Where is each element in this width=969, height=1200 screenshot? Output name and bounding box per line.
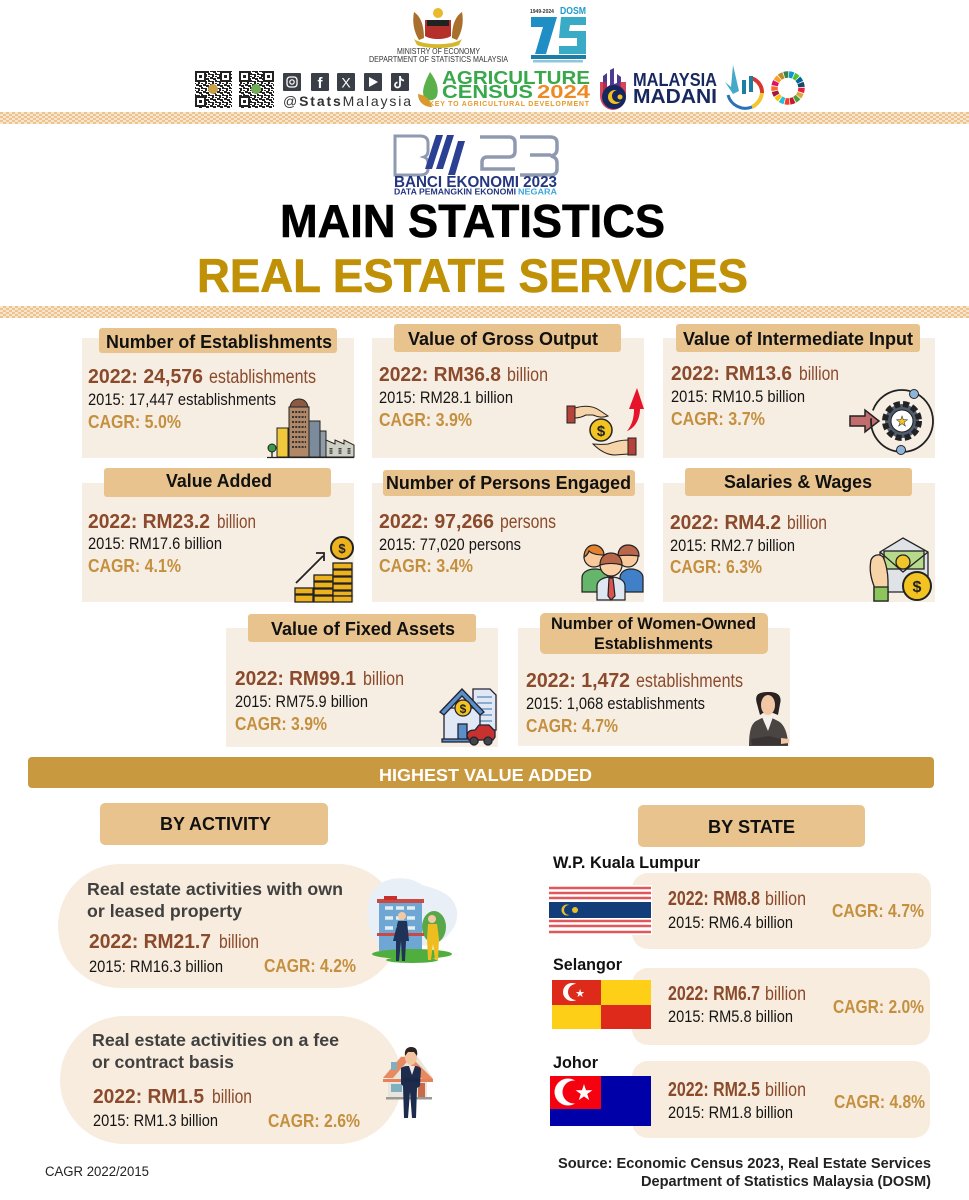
panel: number of establishments [82, 328, 354, 458]
heading: by activity: BY ACTIVITY [160, 813, 272, 834]
panel: Selangor [552, 968, 930, 1045]
panel: value added: 2015: RM17.6 billion [88, 534, 222, 553]
title: MAIN STATISTICS [280, 195, 665, 247]
logo: Banci Ekonomi 2023: NEGARA [518, 188, 557, 196]
heading: Salaries & Wages [724, 471, 872, 492]
source [558, 1156, 931, 1190]
flag: Selangor: ★ [575, 988, 585, 1000]
panel: number of persons engaged: 2015: 77,020 persons [379, 535, 521, 554]
panel: value of fixed assets: 2015: RM75.9 billion [235, 692, 368, 711]
logo: Agriculture Census 2024: KEY TO AGRICULTURAL DEVELOPMENT [429, 101, 590, 108]
heading: Number of Establishments [106, 331, 332, 352]
panel: value of intermediate input [663, 324, 935, 458]
panel: real estate activities on a fee or contract basis [60, 1016, 433, 1144]
panel: W.P. Kuala Lumpur: CAGR: 4.7% [832, 900, 924, 921]
heading: Value of Intermediate Input [683, 328, 913, 349]
panel: real estate activities with own or leased property: or leased property [87, 901, 242, 921]
panel: number of persons engaged [372, 470, 644, 602]
heading: by activity [100, 803, 328, 845]
panel: salaries and wages: 2015: RM2.7 billion [670, 536, 795, 555]
banner: highest value added [28, 757, 934, 788]
title: REAL ESTATE SERVICES [197, 249, 748, 302]
panel: real estate activities with own or leased property [58, 864, 457, 988]
logo: Banci Ekonomi 2023: BANCI EKONOMI 2023 [394, 174, 557, 191]
panel: number of women-owned establishments [518, 613, 790, 746]
panel: value of intermediate input: CAGR: 3.7% [671, 408, 765, 429]
panel: real estate activities on a fee or contract basis: billion [212, 1087, 252, 1108]
panel: value of intermediate input: 2015: RM10.5 billion [671, 387, 805, 406]
logo: Malaysia Madani: MALAYSIA [633, 70, 717, 90]
panel: real estate activities with own or leased property: billion [219, 932, 259, 953]
icon: gear with input arrow: ★ [896, 413, 908, 429]
heading: by state: BY STATE [708, 816, 795, 837]
icon: rising coin stacks [295, 537, 353, 602]
social media icons: f [318, 75, 324, 92]
flag: Johor [550, 1076, 651, 1126]
panel: value of gross output [372, 324, 644, 458]
logo: digital ring [725, 65, 762, 108]
panel: real estate activities with own or leased property: Real estate activities with own [87, 879, 343, 899]
heading: Value of Gross Output [408, 328, 598, 349]
panel: number of persons engaged: CAGR: 3.4% [379, 555, 473, 576]
logo: Agriculture Census 2024: AGRICULTURE [442, 68, 590, 88]
panel: real estate activities with own or leased property: CAGR: 4.2% [264, 955, 356, 976]
icon: city buildings [267, 399, 354, 458]
panel: value of gross output: 2015: RM28.1 billion [379, 388, 513, 407]
panel: value of fixed assets: CAGR: 3.9% [235, 713, 327, 734]
icon: house, document and car: $ [460, 702, 467, 716]
heading: Establishments [594, 634, 713, 653]
icon: apartment building with agent and worker [367, 878, 457, 963]
panel: value of intermediate input: 2022: RM13.6 [671, 363, 792, 385]
panel: salaries and wages: CAGR: 6.3% [670, 556, 762, 577]
panel: W.P. Kuala Lumpur: 2015: RM6.4 billion [668, 913, 793, 932]
QR code 2 [239, 71, 274, 108]
icon: businesswoman [749, 692, 789, 746]
flag: Selangor [552, 980, 651, 1029]
logo: SDG wheel [774, 74, 802, 102]
heading: by state [638, 805, 865, 847]
heading [551, 614, 756, 653]
panel: number of women-owned establishments: CAGR: 4.7% [526, 715, 618, 736]
panel: number of establishments: 2022: 24,576 [88, 366, 203, 388]
panel: Johor: 2015: RM1.8 billion [668, 1103, 793, 1122]
panel: value of fixed assets: billion [363, 669, 404, 690]
panel: Selangor: 2015: RM5.8 billion [668, 1007, 793, 1026]
logo: DOSM 75: DOSM [560, 6, 586, 17]
social media icons: X [341, 74, 351, 90]
panel: number of women-owned establishments: establishments [636, 671, 743, 692]
flag: Kuala Lumpur [549, 885, 652, 935]
logo: DOSM 75 [530, 6, 586, 62]
panel: Selangor: billion [765, 984, 806, 1005]
panel: Johor: CAGR: 4.8% [834, 1091, 925, 1112]
panel: number of women-owned establishments: 2022: 1,472 [526, 670, 630, 692]
panel: salaries and wages: 2022: RM4.2 [670, 512, 781, 534]
panel: Selangor: CAGR: 2.0% [833, 996, 924, 1017]
note: CAGR period: CAGR 2022/2015 [45, 1164, 149, 1179]
department name: MINISTRY OF ECONOMY [397, 47, 481, 56]
panel: number of establishments: CAGR: 5.0% [88, 411, 181, 432]
panel: number of persons engaged: 2022: 97,266 [379, 511, 494, 533]
panel: value of intermediate input: billion [799, 364, 839, 385]
social handle: @StatsMalaysia [283, 93, 411, 109]
panel: value added [82, 468, 354, 602]
panel: value added: CAGR: 4.1% [88, 555, 181, 576]
panel: value added: billion [217, 512, 256, 533]
QR code 1 [195, 71, 232, 108]
heading: Value Added [166, 470, 272, 491]
state label: Selangor: Selangor [553, 956, 623, 974]
panel: real estate activities on a fee or contract basis: 2015: RM1.3 billion [93, 1111, 218, 1130]
social media icons [283, 73, 409, 92]
heading: Number of Women-Owned [551, 614, 756, 633]
source: Source: Economic Census 2023, Real Estate Services [558, 1156, 931, 1172]
panel: number of establishments: 2015: 17,447 establishments [88, 390, 276, 409]
logo: Agriculture Census 2024 [418, 68, 590, 108]
logo: Banci Ekonomi 2023 [394, 135, 557, 196]
department name: DEPARTMENT OF STATISTICS MALAYSIA [369, 55, 509, 64]
icon: group of people [582, 545, 643, 600]
heading: Value of Fixed Assets [271, 618, 455, 639]
icon: hands with coin and up arrow: $ [597, 423, 606, 440]
icon: house, document and car [440, 689, 496, 745]
icon: agent in front of house [383, 1047, 433, 1118]
logo: Malaysia coat of arms [413, 8, 463, 48]
panel: value of fixed assets [226, 614, 498, 747]
icon: envelope with money [870, 538, 931, 601]
panel: number of establishments: establishments [209, 367, 316, 388]
panel: real estate activities on a fee or contract basis: or contract basis [92, 1052, 234, 1072]
panel: W.P. Kuala Lumpur: billion [765, 889, 806, 910]
panel: value of gross output: 2022: RM36.8 [379, 364, 501, 386]
state label: W.P. Kuala Lumpur: W.P. Kuala Lumpur [553, 854, 701, 872]
panel: number of persons engaged: persons [500, 512, 556, 533]
panel: real estate activities on a fee or contract basis: Real estate activities on a fee [92, 1030, 339, 1050]
panel: salaries and wages: billion [787, 513, 827, 534]
panel: real estate activities on a fee or contract basis: 2022: RM1.5 [93, 1086, 204, 1108]
panel: Johor [550, 1061, 930, 1138]
logo: DOSM 75: 1949-2024 [530, 9, 554, 15]
department name [369, 47, 509, 64]
state label: Johor: Johor [553, 1054, 599, 1072]
logo: Malaysia Madani: MADANI [633, 86, 717, 108]
panel: Selangor: 2022: RM6.7 [668, 983, 760, 1005]
icon: gear with input arrow [850, 390, 933, 454]
panel: real estate activities with own or leased property: 2022: RM21.7 [89, 931, 211, 953]
panel: Johor: 2022: RM2.5 [668, 1079, 760, 1101]
panel: value of gross output: billion [507, 365, 548, 386]
icon: envelope with money: $ [913, 579, 922, 596]
panel: value of fixed assets: 2022: RM99.1 [235, 668, 356, 690]
panel: W.P. Kuala Lumpur [549, 873, 931, 949]
panel: number of women-owned establishments: 2015: 1,068 establishments [526, 694, 705, 713]
panel: real estate activities on a fee or contract basis: CAGR: 2.6% [268, 1110, 360, 1131]
flag: Johor: ★ [574, 1080, 594, 1105]
logo: Agriculture Census 2024: 2024 [537, 82, 590, 102]
logo: Agriculture Census 2024: CENSUS [442, 82, 533, 102]
heading: Number of Persons Engaged [386, 472, 631, 493]
title [197, 195, 748, 302]
logo: Malaysia Madani [600, 68, 717, 110]
panel: value of gross output: CAGR: 3.9% [379, 409, 472, 430]
icon: rising coin stacks: $ [338, 541, 346, 556]
panel: real estate activities with own or leased property: 2015: RM16.3 billion [89, 957, 223, 976]
panel: W.P. Kuala Lumpur: 2022: RM8.8 [668, 888, 760, 910]
panel: salaries and wages [663, 468, 935, 602]
logo: Banci Ekonomi 2023: DATA PEMANGKIN EKONOMI [394, 188, 516, 196]
panel: value added: 2022: RM23.2 [88, 511, 210, 533]
icon: hands with coin and up arrow [567, 388, 644, 455]
source: Department of Statistics Malaysia (DOSM) [641, 1174, 931, 1190]
banner: highest value added: HIGHEST VALUE ADDED [379, 765, 592, 785]
panel: Johor: billion [765, 1080, 806, 1101]
